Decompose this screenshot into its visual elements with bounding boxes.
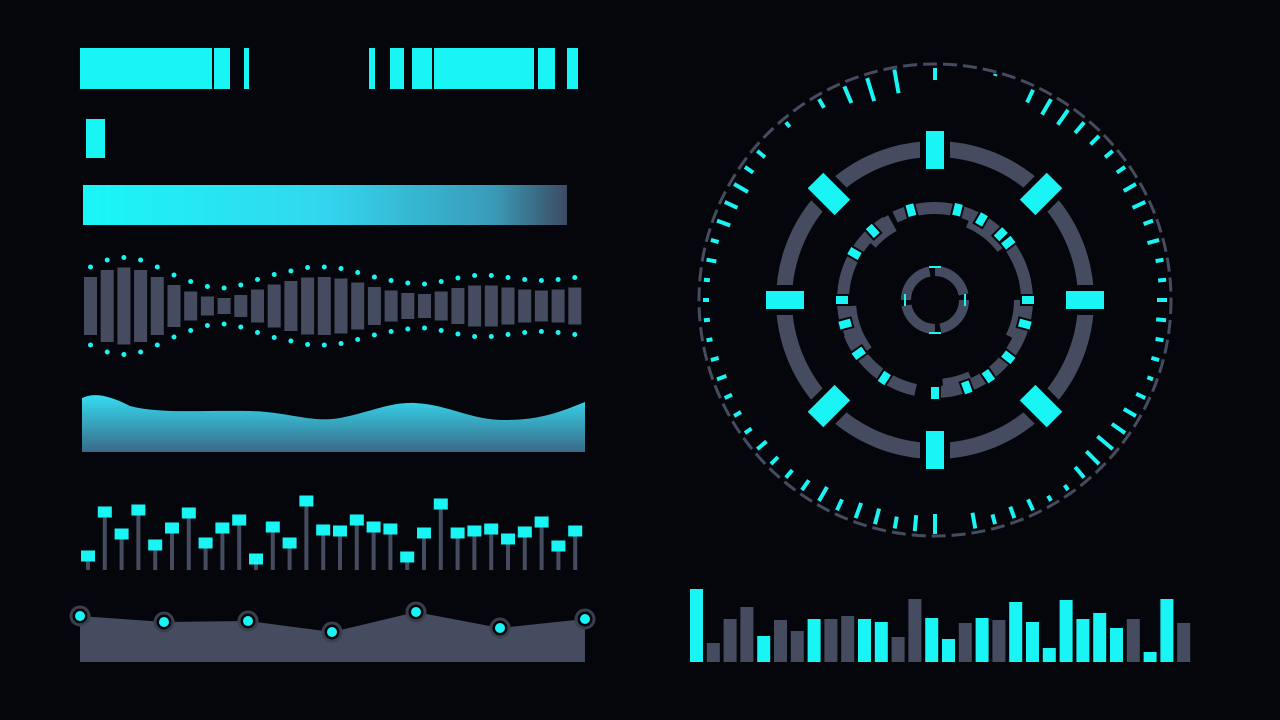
radar / target dial: [699, 64, 1171, 536]
wave area chart: [82, 395, 585, 452]
small indicator block: [86, 119, 105, 158]
line area chart with points: [71, 603, 594, 662]
bottom right bar chart: [690, 589, 1190, 662]
gradient progress bar: [83, 185, 567, 225]
slider equalizer: [81, 496, 582, 570]
top segmented bar: [80, 48, 578, 89]
waveform bars with dots: [84, 255, 581, 357]
